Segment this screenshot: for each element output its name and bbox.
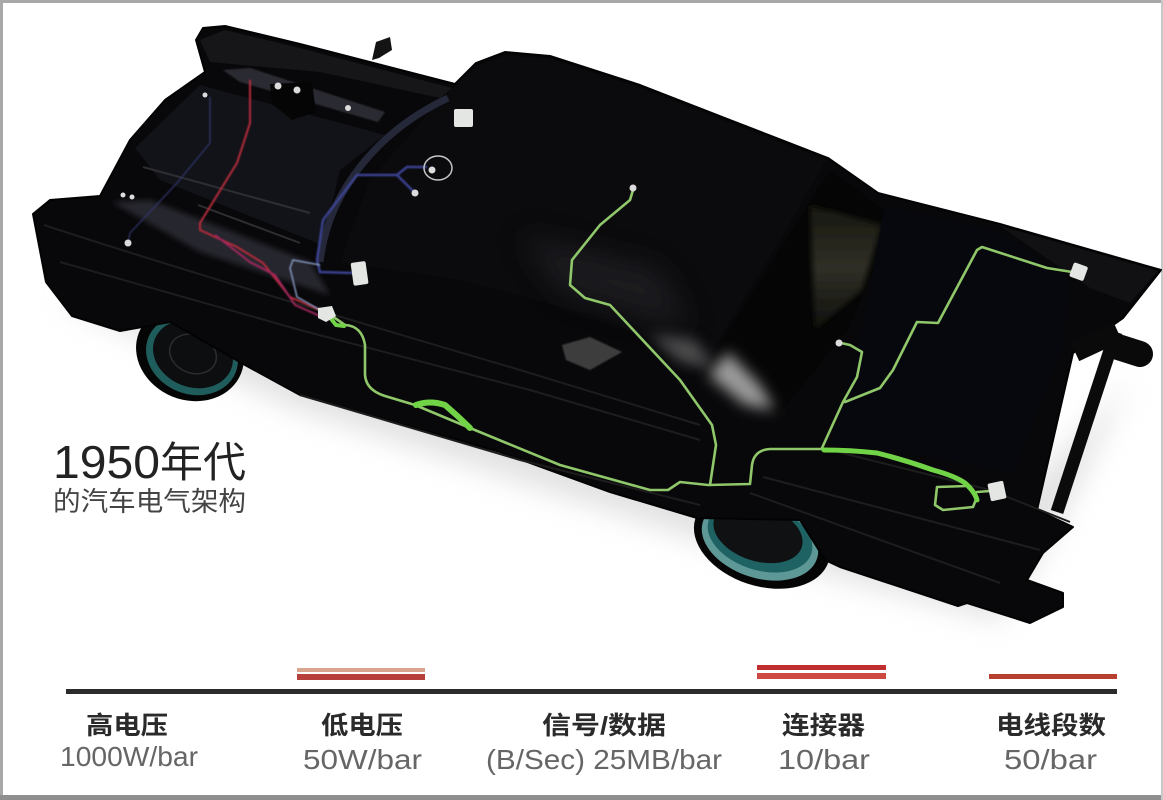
rear fin chrome panel — [112, 200, 330, 295]
car soft shadow — [60, 300, 1130, 620]
legend: wire segments: 电线段数 — [996, 711, 1106, 740]
signal green wiring thin — [332, 190, 1072, 510]
legend: wire segments — [996, 711, 1106, 775]
legend: connectors: 连接器 — [782, 712, 865, 740]
legend: signal and data: (B/Sec) 25MB/bar — [486, 744, 722, 775]
legend: high voltage — [60, 712, 198, 772]
roof surface — [340, 55, 826, 370]
car side body lines — [44, 225, 1070, 583]
legend baseline — [66, 689, 1117, 694]
sensor ring — [424, 156, 452, 180]
rear window arc — [320, 98, 448, 262]
title: 1950 — [53, 436, 160, 488]
roof soft highlight — [520, 235, 690, 330]
legend: signal and data — [486, 712, 722, 775]
front fin — [1000, 226, 1158, 303]
windshield base highlight — [708, 352, 775, 410]
front bumper bar and headlight mount — [1057, 332, 1140, 512]
connector dots — [120, 82, 842, 346]
trunk crease lines — [143, 167, 310, 243]
legend: wire segments: 50/bar — [1004, 744, 1097, 775]
legend: high voltage: 1000W/bar — [60, 741, 198, 772]
rear trunk lid — [135, 85, 385, 245]
windshield glass reflection — [810, 205, 882, 330]
rear control module — [270, 82, 316, 120]
high voltage red wire — [200, 80, 320, 316]
rear deck trim — [223, 68, 385, 122]
legend: low voltage — [303, 712, 422, 775]
car body silhouette — [33, 26, 1161, 623]
wheel: front — [681, 475, 843, 605]
wheel: rear — [121, 289, 259, 417]
rear wing mirror — [372, 37, 392, 60]
rear fin top surface — [200, 30, 452, 98]
low voltage blue wire — [128, 97, 427, 310]
legend: low voltage: 低电压 — [321, 712, 403, 740]
legend: high voltage: 高电压 — [86, 712, 168, 740]
title — [53, 436, 246, 488]
connectors — [318, 109, 1088, 501]
legend: low voltage: 50W/bar — [303, 744, 422, 775]
signal green wiring thick — [328, 315, 977, 500]
legend: connectors — [778, 712, 870, 775]
side window reflection — [562, 337, 622, 370]
hood — [830, 205, 1070, 473]
legend: signal and data: 信号/数据 — [542, 712, 666, 740]
title: 年代 — [160, 439, 246, 486]
windshield — [700, 170, 888, 415]
roof window highlight — [650, 335, 715, 368]
subtitle: 的汽车电气架构 — [53, 487, 246, 517]
connector bars — [757, 665, 886, 679]
low voltage bars — [297, 668, 425, 680]
wire segment bar — [989, 674, 1117, 679]
legend: connectors: 10/bar — [778, 744, 870, 775]
